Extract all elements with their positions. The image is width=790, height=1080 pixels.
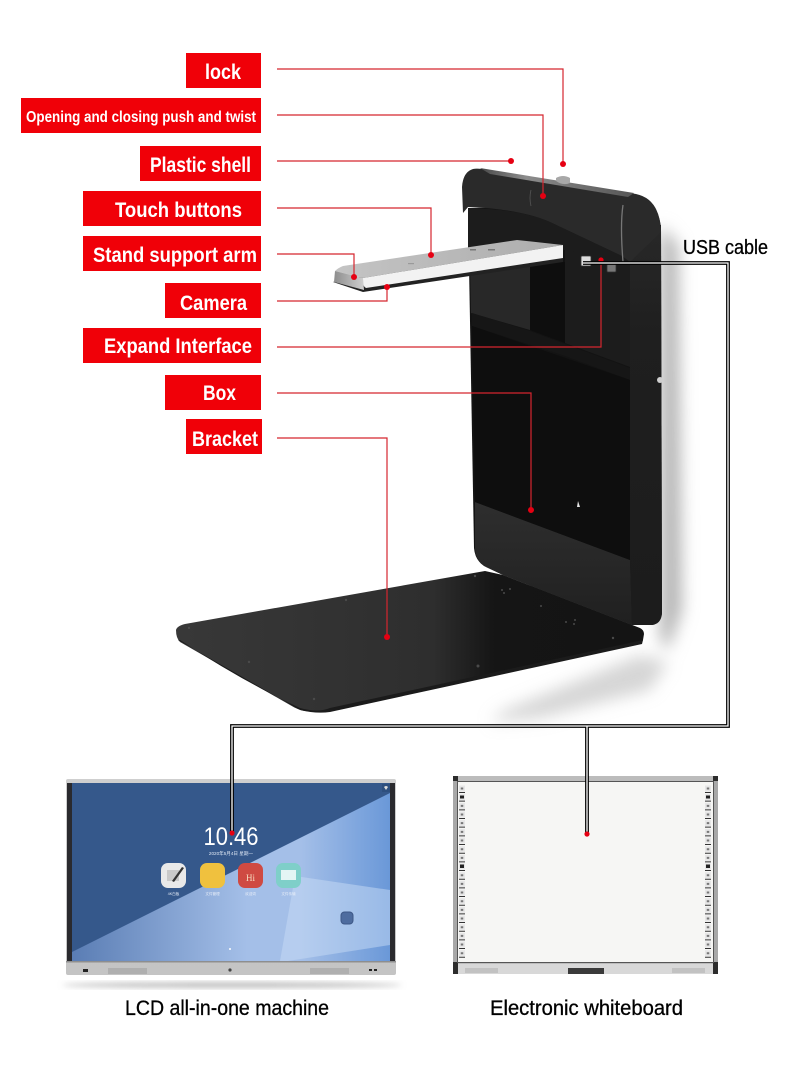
USB ports <box>581 256 616 272</box>
app icons: 文件管理 <box>205 891 220 896</box>
label: box: Box <box>203 382 236 405</box>
tray <box>458 964 713 974</box>
label: plastic shell: Plastic shell <box>150 154 251 177</box>
support arm <box>333 240 563 292</box>
interface panel <box>565 245 630 367</box>
target dots on displays <box>229 830 590 837</box>
label: opening and closing: Opening and closing push and twist <box>26 109 256 126</box>
upper left inner panel <box>470 262 530 330</box>
clock: 10:46 <box>204 823 258 851</box>
floating button <box>341 912 353 924</box>
date: 2020年5月4日 星期一 <box>209 850 253 857</box>
screen <box>72 783 390 961</box>
label: plastic shell <box>140 146 261 181</box>
label: expand interface: Expand Interface <box>104 335 252 358</box>
left icon column <box>460 786 464 958</box>
right side strip <box>622 205 662 625</box>
label: stand support arm <box>83 236 261 271</box>
device: stand with box and bracket <box>176 168 682 722</box>
bottom hole <box>577 501 580 507</box>
side bump <box>657 377 663 383</box>
lower slab <box>475 502 632 625</box>
USB cable label: USB cable <box>683 237 768 259</box>
device shadow <box>490 225 682 722</box>
label: expand interface <box>83 328 261 363</box>
app icons: 4K白板 <box>168 891 180 896</box>
bottom bar details <box>66 948 396 974</box>
neck below cover <box>468 208 630 264</box>
top edge highlight <box>480 168 634 197</box>
frame <box>453 776 718 974</box>
red leader lines and dots <box>277 69 604 640</box>
label: lock <box>186 53 261 88</box>
label: lock: lock <box>205 61 241 84</box>
LCD all-in-one machine <box>62 779 402 988</box>
label: camera: Camera <box>180 292 247 315</box>
label: stand support arm: Stand support arm <box>93 244 257 267</box>
label: box <box>165 375 261 410</box>
app icons: 文件传输 <box>281 891 296 896</box>
lock screw <box>556 176 570 184</box>
label: bracket: Bracket <box>192 428 258 451</box>
head top cover <box>462 169 661 262</box>
floor shadow <box>62 982 402 988</box>
frame <box>66 779 396 975</box>
label: bracket <box>186 419 262 454</box>
app icons: 欢迎词 <box>245 891 256 896</box>
electronic whiteboard <box>453 776 718 974</box>
label: opening and closing <box>21 98 261 133</box>
label: touch buttons <box>83 191 261 226</box>
whiteboard caption: Electronic whiteboard <box>490 997 683 1020</box>
corners <box>453 776 718 974</box>
writing surface <box>458 782 714 962</box>
USB cable connector lines <box>232 263 728 834</box>
app icons <box>161 863 301 896</box>
LCD caption: LCD all-in-one machine <box>125 997 329 1020</box>
label: touch buttons: Touch buttons <box>115 199 242 222</box>
app icons: Hi <box>246 873 255 883</box>
bracket base plate <box>176 571 644 713</box>
box body <box>462 168 663 625</box>
label: camera <box>165 283 261 318</box>
right icon column <box>706 786 710 958</box>
